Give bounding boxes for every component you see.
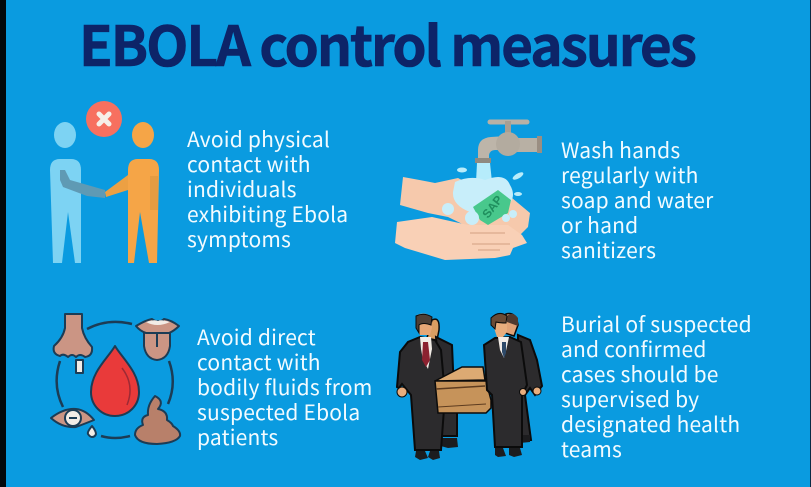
title: EBOLA control measures: [79, 2, 695, 82]
text: avoid physical contact: exhibiting Ebola: [187, 199, 348, 229]
text: avoid physical contact: individuals: [187, 174, 297, 204]
icon: hands under a running tap with soap: [395, 121, 542, 260]
text: burial supervision: [561, 309, 752, 464]
text: burial supervision: designated health: [561, 409, 740, 439]
text: burial supervision: Burial of suspected: [561, 309, 752, 339]
text: wash hands: regularly with: [561, 160, 699, 190]
text: avoid physical contact: Avoid physical: [187, 124, 330, 154]
text: avoid physical contact: [187, 124, 348, 254]
text: burial supervision: and confirmed: [561, 334, 707, 364]
text: wash hands: soap and water: [561, 185, 713, 215]
text: wash hands: or hand: [561, 210, 638, 240]
text: burial supervision: cases should be: [561, 359, 719, 389]
text: wash hands: Wash hands: [561, 135, 680, 165]
icon: nose, tongue, eye, stool and blood drop: [51, 314, 180, 444]
icon: pallbearers carrying a coffin: [397, 313, 542, 460]
text: avoid physical contact: contact with: [187, 149, 311, 179]
text: burial supervision: teams: [561, 434, 622, 464]
text: burial supervision: supervised by: [561, 384, 699, 414]
text: wash hands: [561, 135, 714, 265]
text: avoid physical contact: symptoms: [187, 224, 291, 254]
text: wash hands: sanitizers: [561, 235, 656, 265]
text: avoid bodily fluids: bodily fluids from: [197, 372, 372, 402]
text: avoid bodily fluids: [197, 322, 372, 452]
soap label: SAP: [479, 193, 506, 221]
text: avoid bodily fluids: Avoid direct: [197, 322, 316, 352]
text: avoid bodily fluids: patients: [197, 422, 278, 452]
icon: two people shaking hands with a red cross: [50, 101, 159, 263]
text: avoid bodily fluids: suspected Ebola: [197, 397, 360, 427]
text: avoid bodily fluids: contact with: [197, 347, 321, 377]
